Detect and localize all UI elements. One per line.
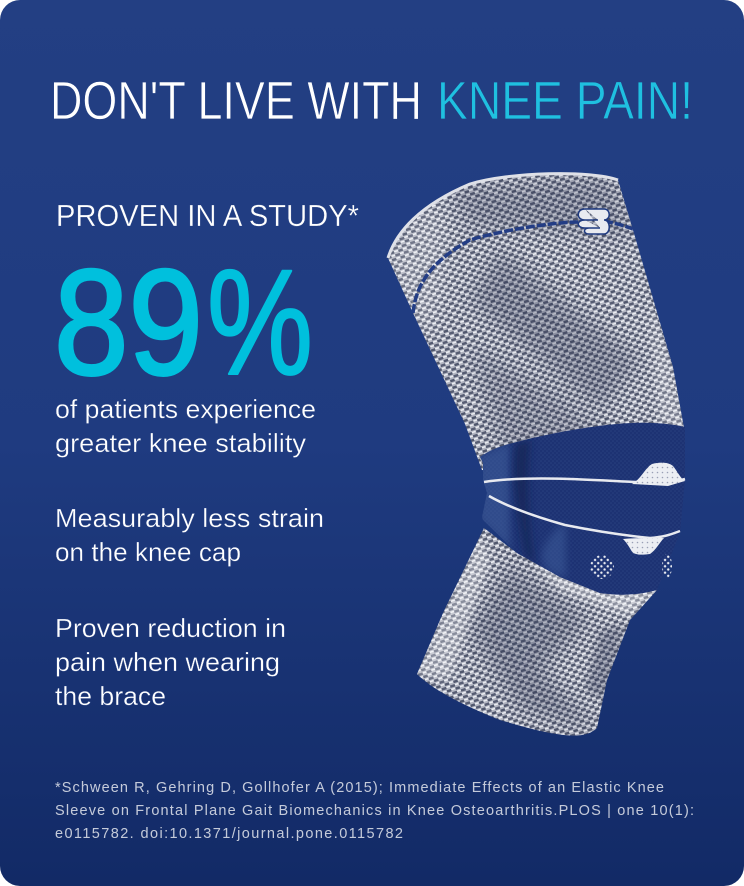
text block: pain reduction: [55, 613, 286, 711]
big statistic: 89%: 89: [54, 238, 203, 406]
footnote: *Schween R, Gehring D, Gollhofer A (2015); Immediate Effects of an Elastic Knee: [55, 780, 664, 796]
navy stripe on upper edge: [413, 221, 633, 313]
big statistic: 89%: [54, 238, 313, 406]
lower knit sleeve: [415, 528, 660, 736]
footnote: Sleeve on Frontal Plane Gait Biomechanics in Knee Osteoarthritis.PLOS | one 10(1):: [55, 803, 694, 819]
text block: pain reduction: the brace: [55, 681, 166, 711]
upper knit sleeve: [385, 174, 690, 480]
title: KNEE PAIN!: [437, 71, 693, 131]
text block: knee stability: of patients experience: [55, 394, 316, 424]
study heading: PROVEN IN A STUDY*: [56, 198, 359, 233]
knee brace illustration: [385, 174, 690, 736]
text block: pain reduction: Proven reduction in: [55, 613, 286, 643]
text block: less strain: Measurably less strain: [55, 503, 324, 533]
text block: pain reduction: pain when wearing: [55, 647, 280, 677]
navy compression band: [478, 423, 685, 595]
title: [50, 71, 693, 131]
footnote: e0115782. doi:10.1371/journal.pone.0115782: [55, 826, 403, 842]
title: DON'T LIVE WITH: [50, 71, 422, 131]
white dotted patches: [590, 463, 685, 579]
text block: knee stability: greater knee stability: [55, 428, 306, 458]
text block: less strain: [55, 503, 324, 567]
footnote: [55, 780, 694, 842]
big statistic: 89%: %: [207, 238, 313, 406]
brand logo: [578, 209, 609, 234]
text block: less strain: on the knee cap: [55, 537, 241, 567]
text block: knee stability: [55, 394, 316, 458]
white strap lines: [484, 478, 685, 538]
